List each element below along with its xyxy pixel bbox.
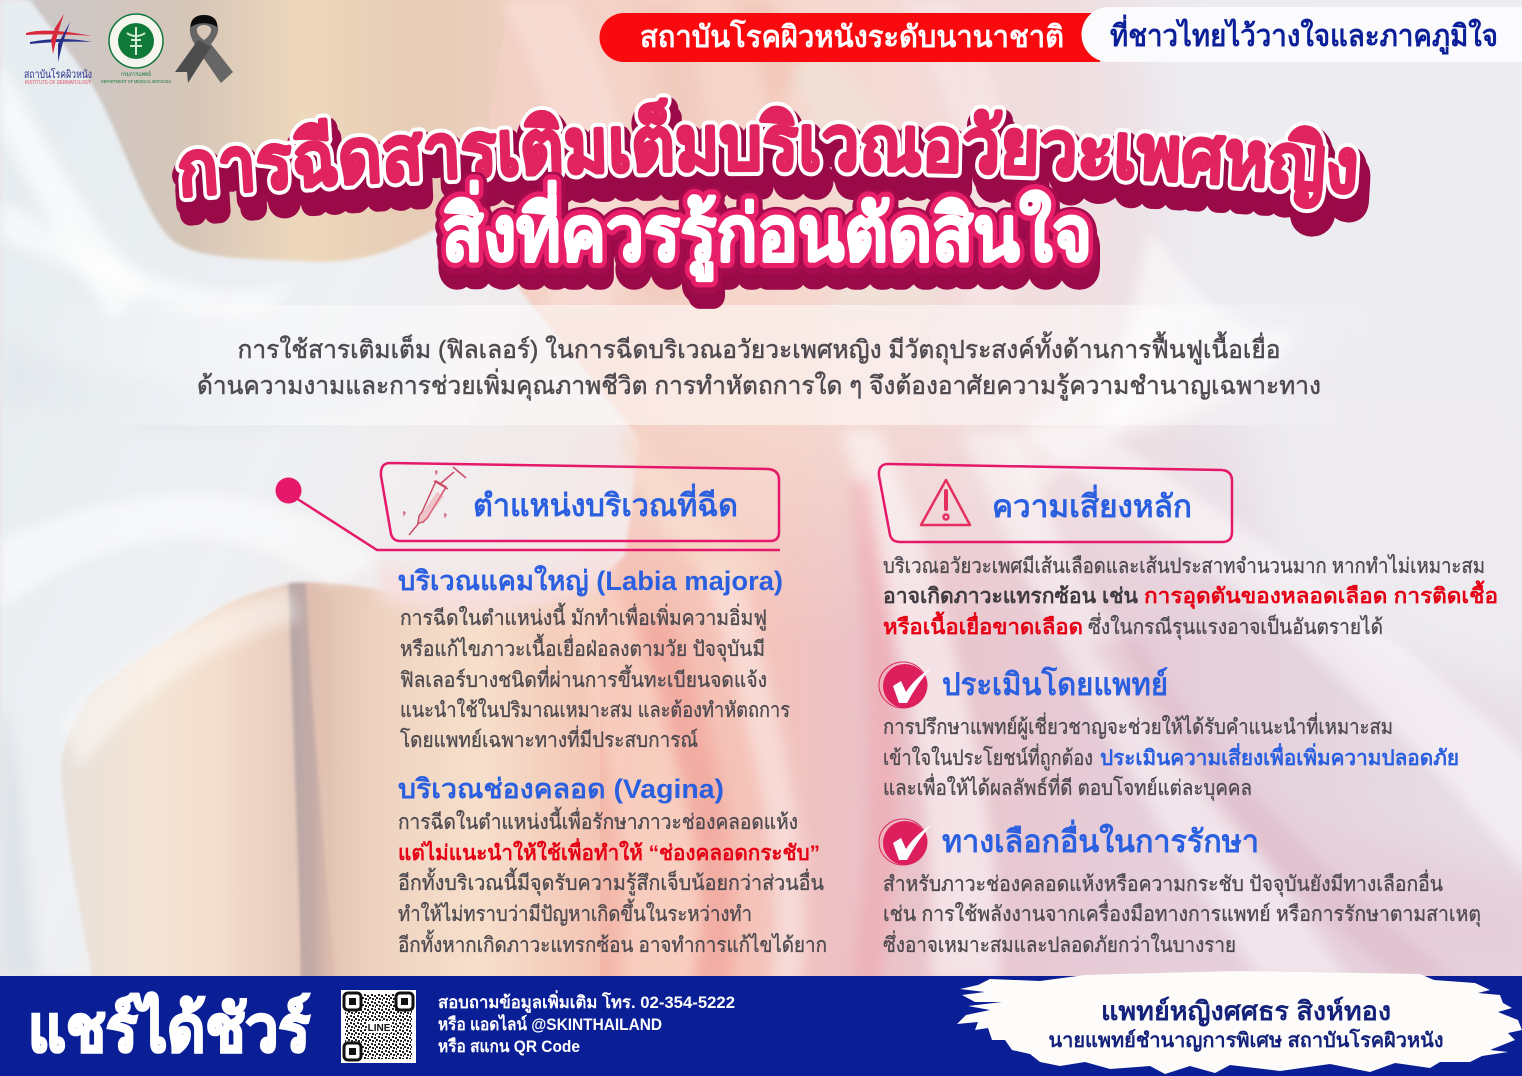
text: doctor assessment body: เข้าใจในประโยชน์ที่ถูกต้อง [883, 743, 1093, 771]
sheer pink folds [500, 0, 1020, 590]
title line 2 [442, 180, 1094, 297]
icon: mourning ribbon [175, 15, 233, 83]
logo: Department of Medical Services: DEPARTMENT OF MEDICAL SERVICES [101, 79, 171, 84]
icon: check badge [879, 662, 931, 708]
title line 2: สิ่งที่ควรรู้ก่อนตัดสินใจ [442, 180, 1092, 281]
panel header: injection sites [381, 463, 779, 541]
panel header: main risks: ความเสี่ยงหลัก [992, 484, 1192, 524]
logo: Department of Medical Services [101, 14, 171, 84]
doctor credit on white brush stroke: แพทย์หญิงศศธร สิงห์ทอง [1101, 996, 1391, 1027]
skin torso [20, 0, 510, 290]
text: labia majora body [400, 603, 790, 752]
doctor credit on white brush stroke: นายแพทย์ชำนาญการพิเศษ สถาบันโรคผิวหนัง [1048, 1028, 1444, 1052]
header banner: white pill: ที่ชาวไทยไว้วางใจและภาคภูมิใจ [1110, 14, 1498, 55]
pointer: dot and leader line [276, 478, 780, 550]
legs [40, 570, 300, 980]
icon: syringe [403, 467, 466, 535]
header banner: red pill: สถาบันโรคผิวหนังระดับนานาชาติ [640, 18, 1064, 54]
title line 1: การฉีดสารเติมเต็มบริเวณอวัยวะเพศหญิง [175, 93, 1360, 214]
heading: doctor assessment: ประเมินโดยแพทย์ [942, 666, 1168, 702]
text: labia majora body: แนะนำใช้ในปริมาณเหมาะสม และต้องทำหัตถการ [400, 698, 790, 722]
section: doctor assessment [879, 662, 1459, 801]
text: labia majora body: โดยแพทย์เฉพาะทางที่มีประสบการณ์ [400, 725, 698, 752]
text: vagina body: อีกทั้งหากเกิดภาวะแทรกซ้อน อาจทำการแก้ไขได้ยาก [398, 930, 827, 957]
title [172, 93, 1370, 309]
text: labia majora body: การฉีดในตำแหน่งนี้ มักทำเพื่อเพิ่มความอิ่มฟู [400, 603, 767, 631]
white cloth [0, 0, 640, 976]
title line 2: สิ่งที่ควรรู้ก่อนตัดสินใจ [442, 182, 1092, 283]
icon: check badge [879, 819, 931, 865]
heading: labia majora: บริเวณแคมใหญ่ (Labia majora) [398, 565, 783, 597]
QR code: LINE [368, 1023, 391, 1034]
intro paragraph [197, 331, 1321, 401]
panel header: main risks [879, 464, 1232, 542]
text: vagina body: ทำให้ไม่ทราบว่ามีปัญหาเกิดขึ้นในระหว่างทำ [398, 899, 752, 926]
QR code [341, 990, 416, 1063]
text: labia majora body: ฟิลเลอร์บางชนิดที่ผ่านการขึ้นทะเบียนจดแจ้ง [400, 665, 767, 692]
section: labia majora [398, 565, 790, 752]
title line 2: สิ่งที่ควรรู้ก่อนตัดสินใจ [444, 196, 1094, 297]
header banner: white pill [1082, 7, 1522, 62]
text: main risks body: การอุดตันของหลอดเลือด การติดเชื้อ [1144, 580, 1498, 610]
text: vagina body [398, 807, 827, 957]
logo: Institute of Dermatology: สถาบันโรคผิวหนัง [24, 67, 92, 81]
title line 1: การฉีดสารเติมเต็มบริเวณอวัยวะเพศหญิง [172, 98, 1366, 219]
text: main risks body: อาจเกิดภาวะแทรกซ้อน เช่น [883, 584, 1139, 608]
icon: warning triangle [921, 480, 970, 525]
text: vagina body: การฉีดในตำแหน่งนี้เพื่อรักษาภาวะช่องคลอดแห้ง [398, 807, 798, 834]
header banner: red pill [600, 13, 1100, 62]
text: alternative treatments body: สำหรับภาวะช่องคลอดแห้งหรือความกระชับ ปัจจุบันยังมีทางเลือกอื่น [883, 869, 1443, 897]
contact text: สอบถามข้อมูลเพิ่มเติม โทร. 02-354-5222 [438, 990, 735, 1014]
text: main risks body [883, 554, 1498, 640]
text: alternative treatments body [883, 869, 1481, 957]
text: main risks body: ซึ่งในกรณีรุนแรงอาจเป็นอันตรายได้ [1088, 612, 1383, 640]
contact text: หรือ สแกน QR Code [438, 1036, 580, 1056]
panel header: injection sites: ตำแหน่งบริเวณที่ฉีด [473, 483, 738, 523]
heading: alternative treatments: ทางเลือกอื่นในการรักษา [942, 819, 1259, 859]
intro paragraph: ด้านความงามและการช่วยเพิ่มคุณภาพชีวิต การทำหัตถการใด ๆ จึงต้องอาศัยความรู้ความชำนาญเฉพาะทาง [197, 368, 1321, 401]
text: vagina body: แต่ไม่แนะนำให้ใช้เพื่อทำให้ “ช่องคลอดกระชับ” [398, 837, 820, 865]
intro paragraph: การใช้สารเติมเต็ม (ฟิลเลอร์) ในการฉีดบริเวณอวัยวะเพศหญิง มีวัตถุประสงค์ทั้งด้านการฟื้นฟูเนื้อเยื่อ [238, 331, 1280, 365]
text: main risks body: หรือเนื้อเยื่อขาดเลือด [883, 611, 1083, 639]
logo: Institute of Dermatology: INSTITUTE OF DERMATOLOGY [25, 80, 91, 86]
intro backdrop band [0, 305, 1522, 425]
section: vagina [398, 774, 827, 957]
right side diagonal folds [840, 230, 1522, 980]
text: alternative treatments body: ซึ่งอาจเหมาะสมและปลอดภัยกว่าในบางราย [883, 930, 1236, 957]
doctor credit on white brush stroke [957, 971, 1522, 1074]
contact text: หรือ แอดไลน์ @SKINTHAILAND [438, 1014, 662, 1034]
text: doctor assessment body: และเพื่อให้ได้ผลลัพธ์ที่ดี ตอบโจทย์แต่ละบุคคล [883, 773, 1252, 801]
title line 1: การฉีดสารเติมเต็มบริเวณอวัยวะเพศหญิง [178, 97, 1357, 210]
contact text [438, 990, 735, 1056]
text: alternative treatments body: เช่น การใช้พลังงานจากเครื่องมือทางการแพทย์ หรือการรักษาตามสาเหตุ [883, 899, 1481, 927]
text: vagina body: อีกทั้งบริเวณนี้มีจุดรับความรู้สึกเจ็บน้อยกว่าส่วนอื่น [398, 868, 824, 896]
text: doctor assessment body: ประเมินความเสี่ยงเพื่อเพิ่มความปลอดภัย [1100, 742, 1459, 770]
logo: Department of Medical Services: กรมการแพทย์ [121, 70, 151, 78]
title line 2: สิ่งที่ควรรู้ก่อนตัดสินใจ [442, 180, 1092, 281]
title line 1: การฉีดสารเติมเต็มบริเวณอวัยวะเพศหญิง [176, 109, 1370, 237]
heading: vagina: บริเวณช่องคลอด (Vagina) [398, 774, 724, 804]
footer slogan: แชร์ได้ชัวร์ [28, 992, 310, 1065]
logo: Institute of Dermatology [24, 14, 92, 86]
footer bar [0, 976, 1522, 1076]
text: doctor assessment body: การปรึกษาแพทย์ผู้เชี่ยวชาญจะช่วยให้ได้รับคำแนะนำที่เหมาะสม [883, 712, 1393, 740]
section: alternative treatments [879, 819, 1481, 957]
text: doctor assessment body [883, 712, 1459, 801]
text: labia majora body: หรือแก้ไขภาวะเนื้อเยื่อฝ่อลงตามวัย ปัจจุบันมี [400, 634, 765, 662]
